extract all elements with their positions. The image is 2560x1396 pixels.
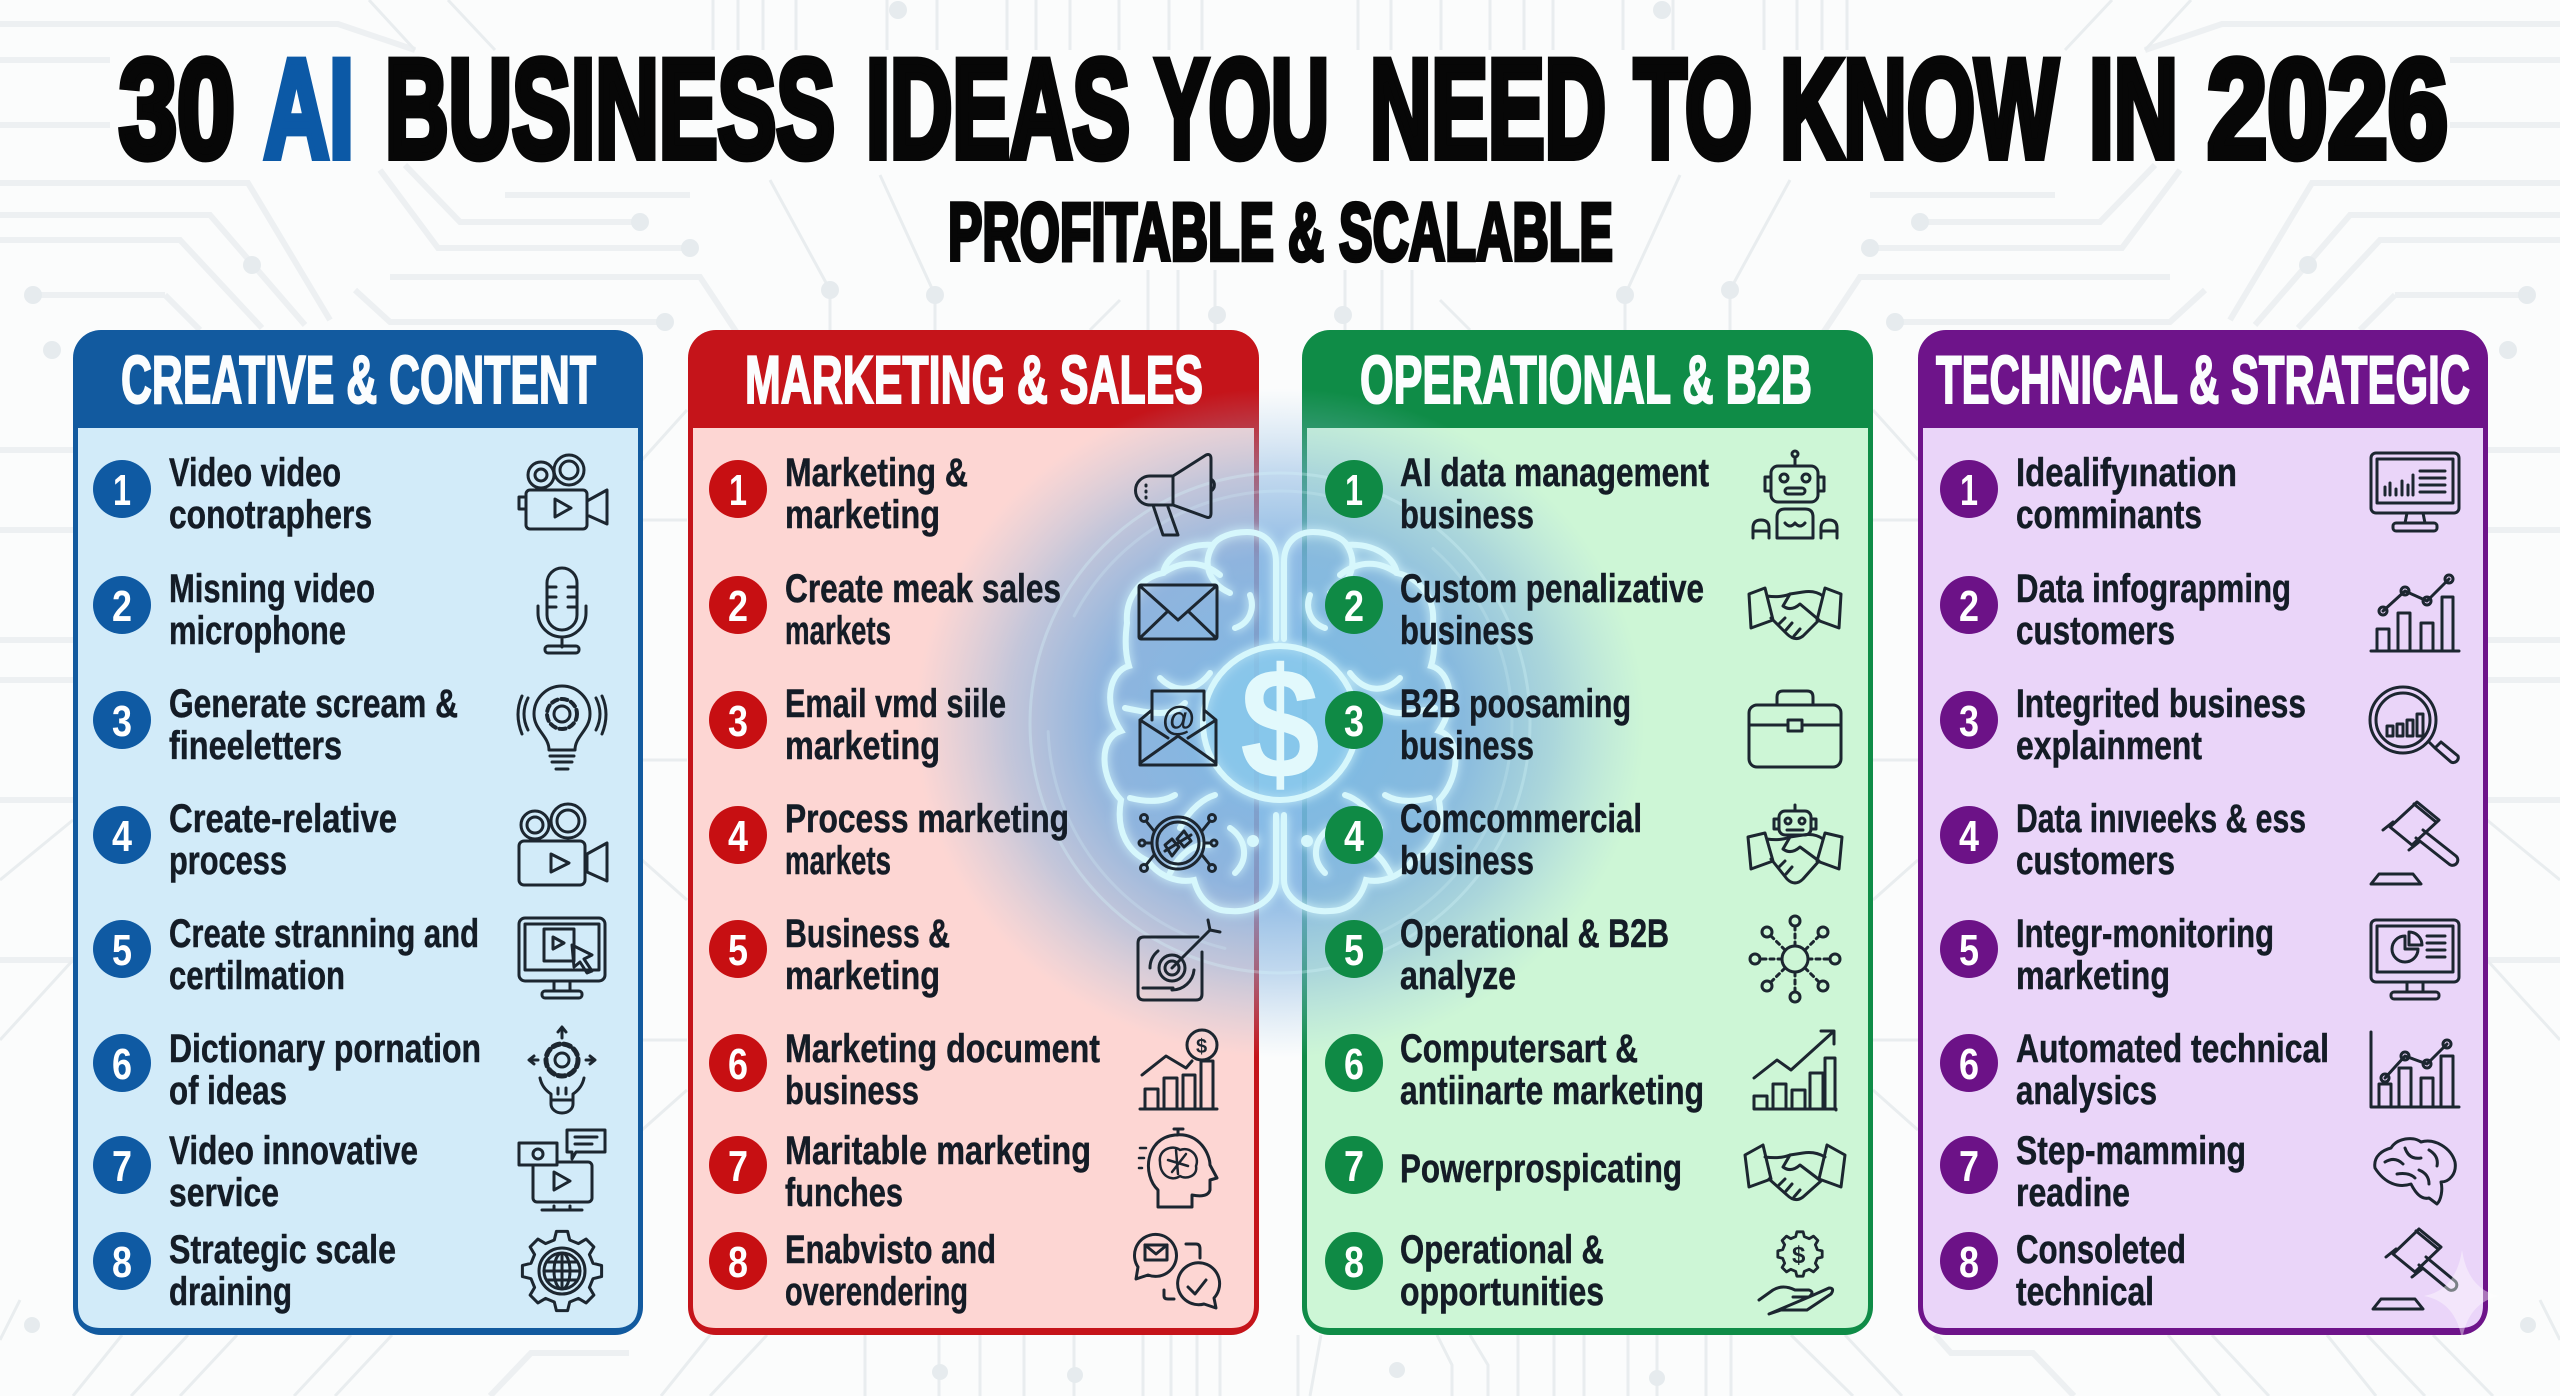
idea 1 (1325, 451, 1837, 538)
heading: creative and content: CREATIVE & CONTENT (121, 342, 596, 418)
idea 8: Operational & (1400, 1228, 1604, 1272)
idea 4: process (169, 839, 287, 883)
idea 8: 8 (112, 1238, 132, 1287)
idea 1: business (1400, 493, 1534, 537)
icon: robot handshake (1748, 805, 1842, 883)
list: operational and b2b (1325, 451, 1845, 1314)
idea 5 (709, 912, 1220, 1000)
icon: bars with line chart (2371, 575, 2459, 651)
idea 3 (709, 682, 1216, 768)
idea 5 (1325, 912, 1840, 1002)
idea 6: of ideas (169, 1069, 287, 1113)
icon: monitor with video and cursor (519, 918, 605, 998)
idea 6 (1940, 1027, 2459, 1113)
idea 4: business (1400, 839, 1534, 883)
title: YOU (1155, 30, 1329, 187)
idea 6: 6 (1959, 1040, 1979, 1089)
idea 2: customers (2016, 609, 2175, 653)
icon: open email: @ (1162, 700, 1195, 738)
idea 8: overendering (785, 1270, 968, 1314)
idea 2: business (1400, 609, 1534, 653)
idea 2: Custom penalizative (1400, 567, 1704, 611)
list: creative and content (93, 451, 607, 1314)
idea 8 (93, 1228, 602, 1314)
idea 6: analysics (2016, 1069, 2157, 1113)
idea 5: Create stranning and (169, 912, 479, 956)
icon: hand holding dollar gear: $ (1792, 1242, 1806, 1269)
subtitle: PROFITABLE (948, 187, 1274, 278)
idea 4: 4 (728, 812, 748, 861)
idea 5: Business & (785, 912, 950, 956)
title: TO (1634, 30, 1752, 187)
idea 7 (1940, 1129, 2455, 1215)
idea 4: 4 (112, 812, 132, 861)
idea 4: customers (2016, 839, 2175, 883)
idea 8 (1940, 1228, 2457, 1314)
idea 1: 1 (1960, 466, 1978, 515)
idea 5: analyze (1400, 954, 1516, 998)
icon: axis chart (2371, 1032, 2459, 1107)
idea 6: Marketing document (785, 1027, 1100, 1071)
idea 5: marketing (2016, 954, 2170, 998)
list: technical and strategic (1940, 451, 2459, 1314)
title: IDEAS (866, 30, 1130, 187)
idea 7: 7 (112, 1142, 132, 1191)
icon: circuit link (1139, 814, 1217, 872)
panel shell: creative and content (73, 330, 643, 1335)
title: 30 (119, 30, 235, 187)
idea 8: 8 (1959, 1238, 1979, 1287)
idea 7: Video innovative (169, 1129, 418, 1173)
idea 5: 5 (1344, 926, 1364, 975)
idea 1: 1 (1345, 466, 1363, 515)
idea 6: Computersart & (1400, 1027, 1638, 1071)
icon: target with dart (1138, 920, 1220, 1000)
idea 1 (93, 451, 607, 537)
idea 6 (709, 1027, 1217, 1113)
list: marketing and sales (709, 451, 1220, 1314)
idea 3: fineeletters (169, 724, 342, 768)
watermark sparkle (2424, 1250, 2500, 1340)
idea 8 (1325, 1228, 1833, 1314)
idea 4: Data inıvıeeks & ess (2016, 797, 2306, 841)
idea 3: 3 (1959, 697, 1979, 746)
idea 5: marketing (785, 954, 940, 998)
idea 5 (1940, 912, 2459, 999)
idea 7: 7 (1344, 1142, 1364, 1191)
idea 7: 7 (1959, 1142, 1979, 1191)
icon: email and check chat bubbles (1134, 1234, 1220, 1308)
title: KNOW (1780, 30, 2058, 187)
icon: magnifier with chart (2370, 687, 2458, 763)
idea 5 (93, 912, 605, 998)
idea 1: comminants (2016, 493, 2202, 537)
idea 6: Automated technical (2016, 1027, 2329, 1071)
idea 7 (709, 1129, 1217, 1215)
idea 4: 4 (1959, 812, 1979, 861)
icon: network nodes (1750, 916, 1840, 1002)
idea 2: 2 (728, 582, 748, 631)
idea 1: marketing (785, 493, 940, 537)
idea 7: service (169, 1171, 279, 1215)
idea 3: 3 (728, 697, 748, 746)
idea 2 (93, 567, 586, 653)
idea 2: Create meak sales (785, 567, 1061, 611)
idea 3: Email vmd siile (785, 682, 1006, 726)
idea 3: Generate scream & (169, 682, 458, 726)
idea 8 (709, 1228, 1220, 1314)
central glowing brain with dollar sign: $ (1240, 636, 1320, 812)
idea 7: 7 (728, 1142, 748, 1191)
idea 8: draining (169, 1270, 292, 1314)
icon: microphone (538, 568, 586, 653)
icon: handshake (1745, 1145, 1845, 1200)
idea 6 (93, 1027, 595, 1113)
idea 2: microphone (169, 609, 346, 653)
title: IN (2089, 30, 2178, 187)
icon: bars with rising arrow (1754, 1031, 1836, 1110)
idea 6: business (785, 1069, 919, 1113)
idea 6: Dictionary pornation (169, 1027, 481, 1071)
idea 1: Marketing & (785, 451, 968, 495)
subtitle: SCALABLE (1339, 187, 1613, 278)
icon: film camera (519, 455, 607, 529)
idea 2 (1940, 567, 2459, 653)
icon: bulb with gear and arrows (529, 1027, 595, 1113)
subtitle: & (1288, 187, 1324, 278)
icon: idea bulb with gear (518, 686, 606, 769)
icon: rising chart with coin (1140, 1030, 1217, 1109)
icon: gear with globe (522, 1231, 602, 1311)
idea 1 (1940, 451, 2459, 537)
icon: handshake (1749, 588, 1841, 639)
heading: marketing and sales: MARKETING & SALES (745, 342, 1203, 418)
title: AI (264, 30, 354, 187)
idea 4: 4 (1344, 812, 1364, 861)
icon: head with brain (1139, 1129, 1217, 1207)
idea 7 (93, 1129, 605, 1215)
idea 1: Video video (169, 451, 341, 495)
idea 5: 5 (112, 926, 132, 975)
idea 8: technical (2016, 1270, 2154, 1314)
idea 3 (1325, 682, 1841, 768)
idea 8: 8 (1344, 1238, 1364, 1287)
idea 8: Strategic scale (169, 1228, 396, 1272)
heading: operational and b2b: OPERATIONAL & B2B (1360, 342, 1812, 418)
icon: brain (2375, 1139, 2455, 1204)
idea 1: AI data management (1400, 451, 1709, 495)
idea 2: Data infograpming (2016, 567, 2291, 611)
idea 1: Idealifyınation (2016, 451, 2237, 495)
icon: megaphone (1136, 454, 1214, 535)
idea 5: 5 (728, 926, 748, 975)
idea 1: 1 (113, 466, 131, 515)
idea 2: 2 (112, 582, 132, 631)
title: NEED (1370, 30, 1606, 187)
idea 3 (93, 682, 606, 769)
idea 7: funches (785, 1171, 903, 1215)
idea 4: markets (785, 839, 891, 883)
idea 3: explainment (2016, 724, 2202, 768)
idea 1 (709, 451, 1214, 537)
idea 1: 1 (729, 466, 747, 515)
idea 4 (1940, 797, 2458, 884)
idea 8: Consoleted (2016, 1228, 2186, 1272)
panel shell: operational and b2b (1302, 330, 1873, 1335)
idea 5: 5 (1959, 926, 1979, 975)
idea 5: certilmation (169, 954, 345, 998)
icon: video and chat (519, 1130, 605, 1210)
icon: open email (1140, 691, 1216, 765)
icon: envelope (1139, 585, 1217, 639)
idea 7 (1325, 1136, 1845, 1200)
idea 2 (1325, 567, 1841, 653)
idea 7: Maritable marketing (785, 1129, 1091, 1173)
title (119, 30, 2448, 187)
idea 2: 2 (1344, 582, 1364, 631)
panel shell: technical and strategic (1918, 330, 2488, 1335)
icon: briefcase (1749, 691, 1841, 767)
title: BUSINESS (385, 30, 835, 187)
idea 8: 8 (728, 1238, 748, 1287)
icon: monitor with chart (2371, 453, 2459, 531)
idea 2: 2 (1959, 582, 1979, 631)
idea 3: marketing (785, 724, 940, 768)
idea 7: Powerprospicating (1400, 1147, 1682, 1191)
idea 2 (709, 567, 1217, 653)
idea 6: 6 (728, 1040, 748, 1089)
central glowing brain with dollar sign (910, 385, 1650, 1065)
icon: film camera (519, 804, 607, 885)
idea 4 (1325, 797, 1842, 883)
idea 3: business (1400, 724, 1534, 768)
idea 4: Create-relative (169, 797, 397, 841)
idea 7: readine (2016, 1171, 2130, 1215)
idea 2: Misning video (169, 567, 375, 611)
icon: rising chart with coin: $ (1196, 1036, 1207, 1058)
icon: gavel (2373, 1229, 2457, 1309)
idea 3: B2B poosaming (1400, 682, 1631, 726)
idea 1: conotraphers (169, 493, 372, 537)
idea 4: Comcommercial (1400, 797, 1642, 841)
icon: gavel (2371, 802, 2458, 884)
icon: robot (1753, 451, 1837, 538)
idea 2: markets (785, 609, 891, 653)
idea 6: 6 (112, 1040, 132, 1089)
idea 5: Integr-monitoring (2016, 912, 2274, 956)
idea 8: opportunities (1400, 1270, 1604, 1314)
idea 3 (1940, 682, 2458, 768)
idea 5: Operational & B2B (1400, 912, 1669, 956)
idea 6: antiinarte marketing (1400, 1069, 1704, 1113)
icon: monitor with pie chart (2371, 920, 2459, 999)
idea 7: Step-mamming (2016, 1129, 2246, 1173)
idea 3: 3 (1344, 697, 1364, 746)
idea 8: Enabvisto and (785, 1228, 996, 1272)
idea 4 (709, 797, 1217, 883)
idea 4: Process marketing (785, 797, 1069, 841)
idea 3: 3 (112, 697, 132, 746)
idea 3: Integrited business (2016, 682, 2306, 726)
idea 6: 6 (1344, 1040, 1364, 1089)
title: 2026 (2207, 30, 2448, 187)
idea 4 (93, 797, 607, 885)
panel shell: marketing and sales (688, 330, 1259, 1335)
icon: hand holding dollar gear (1759, 1232, 1833, 1314)
idea 6 (1325, 1027, 1836, 1113)
